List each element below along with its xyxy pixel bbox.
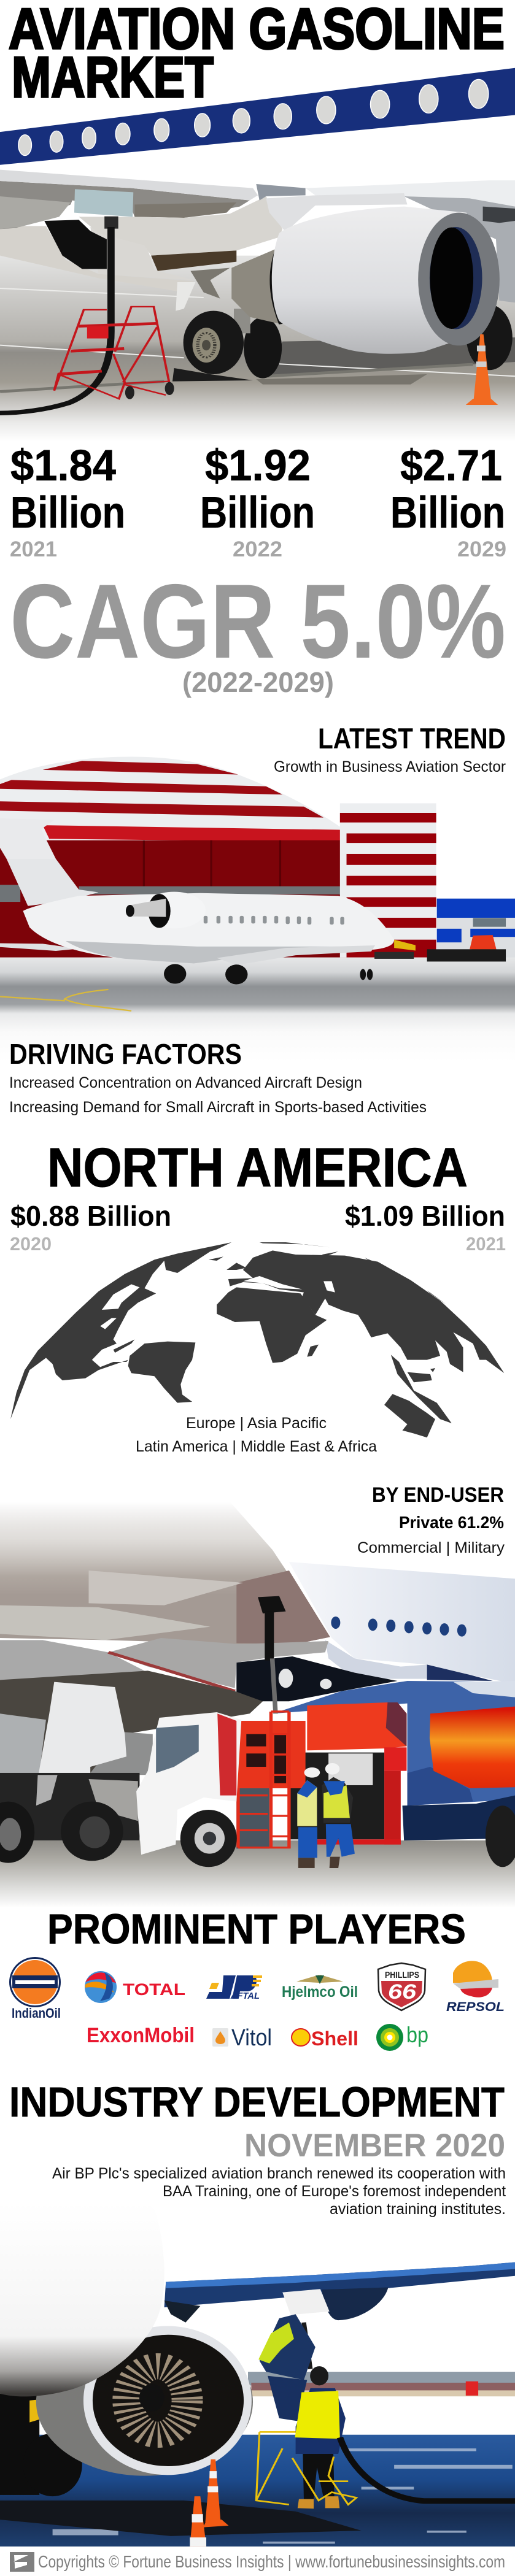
truck front wheel — [180, 1810, 237, 1867]
wing lights — [483, 207, 515, 223]
company logos — [9, 1957, 505, 2051]
africa — [217, 1287, 327, 1363]
aircraft blue window band — [0, 68, 515, 165]
engine intake ring — [418, 213, 500, 345]
flap hinge — [176, 282, 195, 311]
logo: Phillips 66 — [378, 1963, 425, 2010]
footer logo — [10, 2552, 34, 2572]
blue building — [437, 899, 515, 960]
tarmac — [0, 1840, 515, 1908]
value 2029: 2029 — [457, 537, 506, 561]
worker on stand — [258, 2314, 316, 2421]
by end-user: Commercial | Military — [357, 1539, 505, 1556]
title: MARKET — [12, 45, 214, 109]
logo: bp: bp — [406, 2022, 428, 2047]
logo: Hjelmco Oil — [282, 1975, 358, 2001]
drain grates — [0, 364, 473, 391]
value 2021 — [10, 442, 125, 561]
red access ladder — [54, 307, 169, 399]
value 2022: $1.92 — [205, 442, 311, 490]
latest trend heading — [274, 722, 506, 775]
north america and greenland — [10, 1242, 231, 1419]
wing underside — [0, 181, 250, 229]
south america — [128, 1342, 195, 1403]
hose line — [304, 2323, 311, 2369]
hangar door header — [43, 825, 349, 846]
by end-user: Private 61.2% — [399, 1513, 504, 1532]
other regions: Latin America | Middle East & Africa — [136, 1438, 377, 1455]
logo: Repsol — [446, 1961, 505, 2014]
fan blades — [128, 2366, 187, 2435]
value 2021: Billion — [10, 488, 125, 537]
logo: Vitol: Vitol — [231, 2025, 272, 2051]
hangar doors — [0, 840, 347, 958]
logo: Hjelmco Oil: Hjelmco Oil — [282, 1983, 358, 2001]
dark chassis — [402, 1796, 515, 1840]
fuel hose — [0, 227, 111, 413]
lower wing surface — [109, 1638, 328, 1688]
hangar red stripes — [0, 761, 323, 818]
wing fading into background — [0, 1502, 330, 1644]
logo: Repsol: REPSOL — [446, 2000, 505, 2014]
far wheel — [467, 305, 513, 370]
door dividers — [143, 840, 281, 887]
undercarriage shadow — [0, 1773, 139, 1840]
other regions — [136, 1415, 377, 1455]
regional values: $1.09 Billion — [345, 1200, 505, 1232]
rear nacelle — [231, 247, 281, 324]
regional values: 2021 — [466, 1233, 506, 1255]
worker left — [297, 1767, 320, 1868]
worker right — [322, 1763, 355, 1868]
aircraft nose — [0, 2202, 165, 2396]
by end-user — [357, 1483, 505, 1556]
madagascar — [307, 1345, 319, 1357]
oil shadow — [256, 374, 427, 385]
open wheel well — [44, 220, 107, 269]
dark oil patch — [0, 2501, 362, 2536]
logo: IndianOil: IndianOil — [12, 2005, 61, 2021]
white airliner fuselage — [289, 1562, 515, 1684]
jet landing gear — [164, 964, 373, 984]
aircraft wheels — [0, 1802, 123, 1863]
value 2022: Billion — [200, 488, 315, 537]
apron ground — [0, 256, 515, 442]
main wheel — [172, 309, 253, 382]
regional values: 2020 — [10, 1233, 52, 1255]
dark area under wing — [0, 1671, 263, 1787]
hatch windows — [279, 1669, 331, 1689]
logo: Total — [85, 1971, 185, 2003]
cab window — [156, 1725, 199, 1773]
value 2022 — [200, 442, 315, 561]
hangar lower windows — [0, 885, 345, 902]
red ladder rack — [236, 1712, 306, 1848]
belly fairing — [90, 227, 194, 280]
central america — [114, 1339, 134, 1353]
wing centre panel — [134, 202, 236, 218]
fuel coupler — [282, 2289, 330, 2315]
by end-user: BY END-USER — [372, 1483, 504, 1507]
other regions: Europe | Asia Pacific — [186, 1415, 327, 1432]
wing leading edge — [0, 170, 258, 201]
rig right panel — [384, 1747, 406, 1771]
rig equipment bay — [289, 1753, 384, 1839]
striped tower — [340, 803, 436, 958]
logo: Phillips 66: PHILLIPS — [385, 1970, 419, 1980]
jet tail fin — [7, 859, 99, 906]
driving factors: Increasing Demand for Small Aircraft in Sports-based Activities — [9, 1099, 427, 1116]
dark wing root — [236, 1656, 397, 1701]
development description: BAA Training, one of Europe's foremost independent — [163, 2183, 506, 2200]
wing root — [256, 184, 306, 201]
white landing flap — [39, 1682, 126, 1787]
market size values — [10, 442, 506, 561]
value 2029: $2.71 — [400, 442, 502, 490]
jet far wing — [0, 943, 79, 951]
gear strut — [36, 1775, 58, 1805]
right truck wheel — [486, 1805, 515, 1867]
fuselage right of engine — [404, 196, 515, 302]
development description: aviation training institutes. — [330, 2201, 506, 2218]
eurasia — [228, 1250, 504, 1373]
orange tanker — [430, 1707, 515, 1788]
wing — [165, 2262, 515, 2307]
hydrant pipe — [258, 1596, 286, 1713]
logo: JP Naftal: NAFTAL — [224, 1991, 260, 2001]
driving factors — [9, 1038, 427, 1116]
world map — [10, 1242, 504, 1437]
yellow gear fairing — [29, 2399, 48, 2423]
CAGR: (2022-2029) — [182, 666, 334, 698]
logo: Phillips 66: 66 — [388, 1980, 417, 2004]
business jet — [0, 818, 394, 984]
development description — [52, 2165, 506, 2218]
engine cowling blue — [273, 1681, 515, 1805]
treeline — [248, 2372, 515, 2385]
red fuel box — [87, 326, 109, 339]
flap fairing — [79, 196, 282, 256]
brown shrubs — [251, 2383, 515, 2391]
southeast asia islands — [391, 1355, 452, 1423]
engine intake — [93, 2335, 244, 2466]
date: NOVEMBER 2020 — [244, 2128, 505, 2164]
hudson bay — [102, 1284, 139, 1310]
apron markings — [0, 288, 515, 376]
logo: IndianOil — [9, 1957, 61, 2021]
belly panel — [325, 1640, 427, 1679]
jet wing — [217, 945, 375, 965]
value 2022: 2022 — [233, 537, 282, 561]
british isles — [227, 1263, 246, 1270]
yellow work stand — [256, 2432, 357, 2505]
fuselage lower shade — [66, 941, 371, 964]
logo: Shell: Shell — [311, 2028, 358, 2050]
snow field edge — [251, 2390, 515, 2396]
driving factors: Increased Concentration on Advanced Aircraft Design — [9, 1074, 362, 1091]
title — [9, 0, 505, 109]
taxiway yellow line — [0, 990, 131, 1011]
black sea — [323, 1281, 335, 1293]
truck cab — [136, 1712, 241, 1855]
logo: JP Naftal — [206, 1975, 262, 2001]
flap highlights — [0, 1605, 210, 1640]
worker in yellow vest — [295, 2366, 346, 2509]
value 2029 — [390, 442, 506, 561]
underwing fairing — [322, 2288, 388, 2320]
driving factors: DRIVING FACTORS — [9, 1038, 242, 1070]
photo: tanker truck refuelling airliner — [0, 1502, 515, 1908]
traffic cone — [466, 334, 498, 405]
north america heading: NORTH AMERICA — [47, 1137, 468, 1199]
regional values: $0.88 Billion — [10, 1200, 171, 1232]
regional values — [10, 1200, 506, 1255]
jet windows — [204, 916, 344, 925]
engine nacelle — [272, 207, 493, 354]
marker post — [466, 2382, 478, 2396]
development description: Air BP Plc's specialized aviation branch renewed its cooperation with — [52, 2165, 506, 2182]
latest trend heading: Growth in Business Aviation Sector — [274, 758, 506, 775]
rear wheel — [244, 317, 282, 379]
logo: bp — [376, 2022, 428, 2051]
cab side red — [217, 1713, 236, 1796]
rig top tank — [307, 1702, 406, 1750]
australia — [384, 1394, 435, 1437]
wing reflection — [236, 1571, 330, 1644]
fuselage belly — [0, 226, 194, 293]
wing root — [165, 2301, 200, 2323]
value 2021: $1.84 — [10, 442, 116, 490]
hose coupler — [104, 217, 118, 229]
value 2021: 2021 — [10, 537, 57, 561]
hangar dome — [0, 756, 348, 958]
jet T-tail — [0, 818, 56, 859]
photo: business jet at striped hangar — [0, 756, 515, 1061]
pylon — [266, 193, 408, 232]
fan hub — [139, 2384, 165, 2412]
apron snow streaks — [53, 2448, 513, 2543]
engine core grey — [0, 1713, 46, 1773]
engine nacelle — [36, 2328, 253, 2476]
fuselage windows — [331, 1617, 467, 1637]
strut — [190, 268, 230, 299]
exposed gear bay — [151, 250, 236, 271]
upper fuselage — [306, 180, 515, 207]
shadow under engine — [266, 337, 515, 376]
flap track pod — [0, 196, 71, 229]
mediterranean — [243, 1276, 302, 1290]
jet fuselage — [23, 893, 394, 964]
logo: Vitol — [212, 2025, 272, 2051]
fuel panel — [74, 189, 133, 217]
jet engine — [142, 892, 206, 928]
ground vehicles — [374, 935, 506, 961]
prominent players heading: PROMINENT PLAYERS — [47, 1905, 466, 1953]
engine intake opening — [430, 227, 482, 329]
great lakes — [100, 1318, 117, 1329]
arctic islands — [209, 1242, 447, 1305]
landing gear and tyre — [0, 2394, 82, 2496]
traffic cones — [190, 2459, 228, 2547]
photo: refuelling at snowy airfield — [0, 2202, 515, 2547]
blue tank body — [408, 1767, 473, 1805]
ground fuel hose — [340, 2437, 515, 2501]
logo: Total: TOTAL — [123, 1980, 185, 1999]
logo: ExxonMobil: ExxonMobil — [87, 2024, 195, 2047]
blue wet apron — [0, 2435, 515, 2547]
apron — [0, 958, 515, 1061]
ladder wheels — [125, 382, 174, 399]
photo: refuelling under aircraft wing — [0, 170, 515, 442]
